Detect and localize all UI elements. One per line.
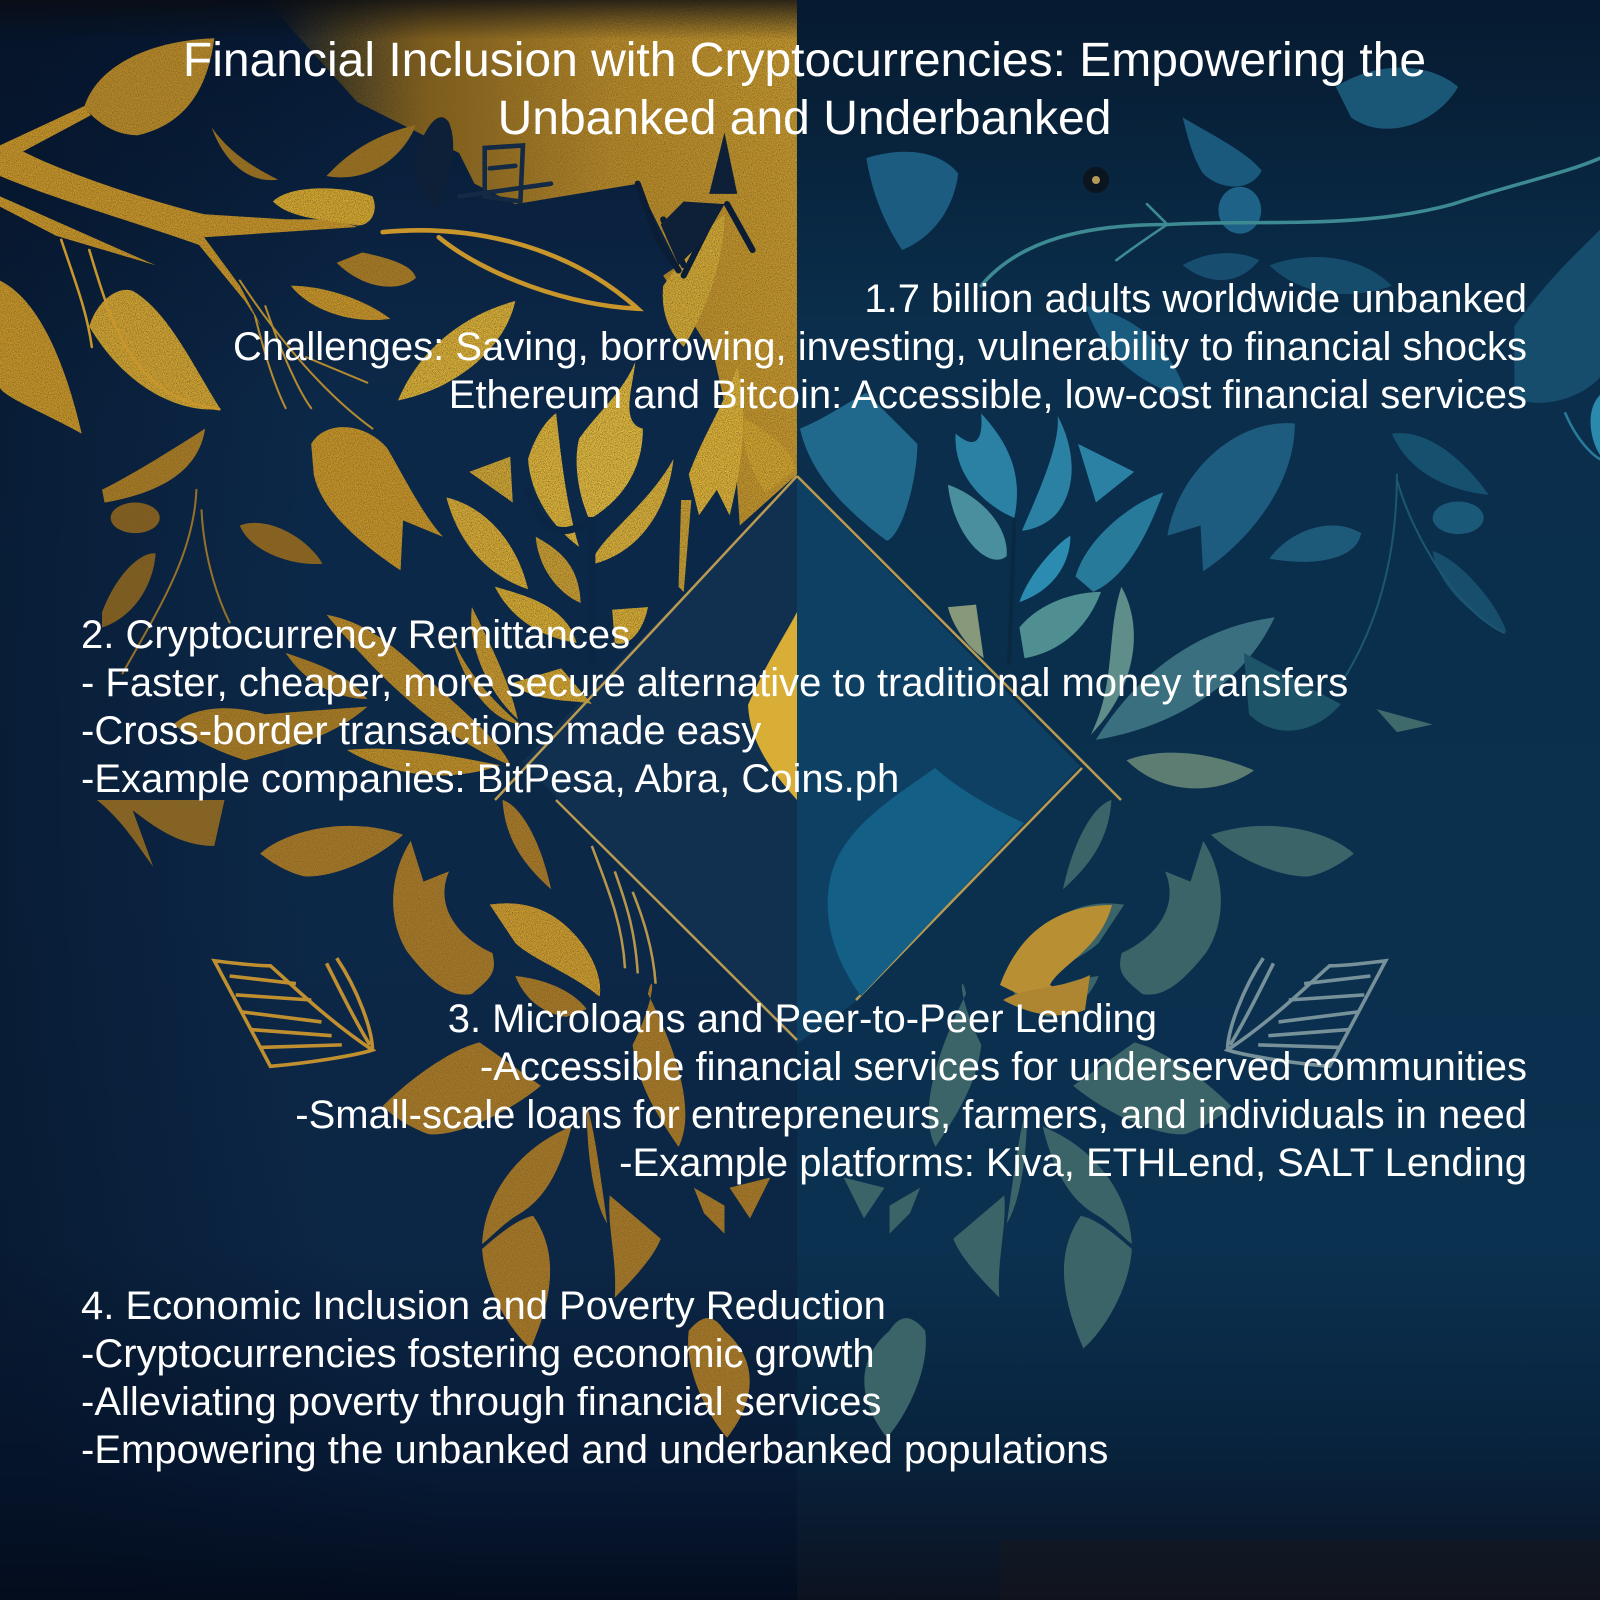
text block: section 3 microloans and lending: 3. Microloans and Peer-to-Peer Lending (448, 997, 1157, 1041)
gold leaf inside diamond (748, 612, 797, 800)
pale teal crescent at right edge (1591, 395, 1600, 455)
lined leaf lower right (1228, 958, 1386, 1066)
diamond left half (522, 478, 797, 1044)
gold leaf lower right (1000, 905, 1112, 1008)
muted leaves lower right, mirrored (844, 800, 1354, 1438)
left navy half (0, 0, 797, 1600)
small gold stud upper right (1083, 167, 1109, 193)
gold leaves upper left (0, 38, 796, 775)
title: Unbanked and Underbanked (498, 92, 1111, 145)
text block: section 3 microloans and lending: -Accessible financial services for underserved communities -Small-scale loans for entrepreneurs, farmers, and individuals in need -Example platforms: Kiva, ETHLend, SALT Lending (295, 1045, 1527, 1185)
diamond gold frame lines (495, 476, 1121, 1040)
gold stems and veins upper left (61, 145, 753, 673)
gold leaves lower left (97, 800, 770, 1438)
teal stems upper right (981, 158, 1600, 684)
dark leaves on gold wall (413, 117, 737, 265)
teal leaves upper right (800, 68, 1600, 788)
text block: section 2 cryptocurrency remittances: 2. Cryptocurrency Remittances - Faster, cheaper, more secure alternative to traditional money transfers -Cross-border transactions made easy -Example companies: BitPesa, Abra, Coins.ph (81, 613, 1348, 801)
title: Financial Inclusion with Cryptocurrencies: Empowering the (183, 34, 1426, 87)
text block: section 1 unbanked facts: 1.7 billion adults worldwide unbanked Challenges: Saving, borrowing, investing, vulnerability to financial shocks Ethereum and Bitcoin: Accessible, low-cost financial services (233, 277, 1527, 417)
vertical gold stripes lower left (592, 846, 656, 984)
diamond right half (797, 478, 1080, 1044)
warm glow bottom right (1000, 1540, 1600, 1600)
title (183, 34, 1426, 145)
right navy-teal half (797, 0, 1600, 1600)
left vignette (0, 0, 797, 1600)
lined leaf lower left (214, 958, 372, 1066)
gold leaf lower right 2 (1003, 975, 1090, 1015)
blue shield shape (828, 768, 1024, 996)
text block: section 4 economic inclusion: 4. Economic Inclusion and Poverty Reduction -Cryptocurrencies fostering economic growth -Alleviating poverty through financial services -Empowering the unbanked and underbanked populations (81, 1284, 1108, 1472)
gold textured wall top (265, 0, 797, 526)
dark shade along top edge (0, 0, 797, 40)
